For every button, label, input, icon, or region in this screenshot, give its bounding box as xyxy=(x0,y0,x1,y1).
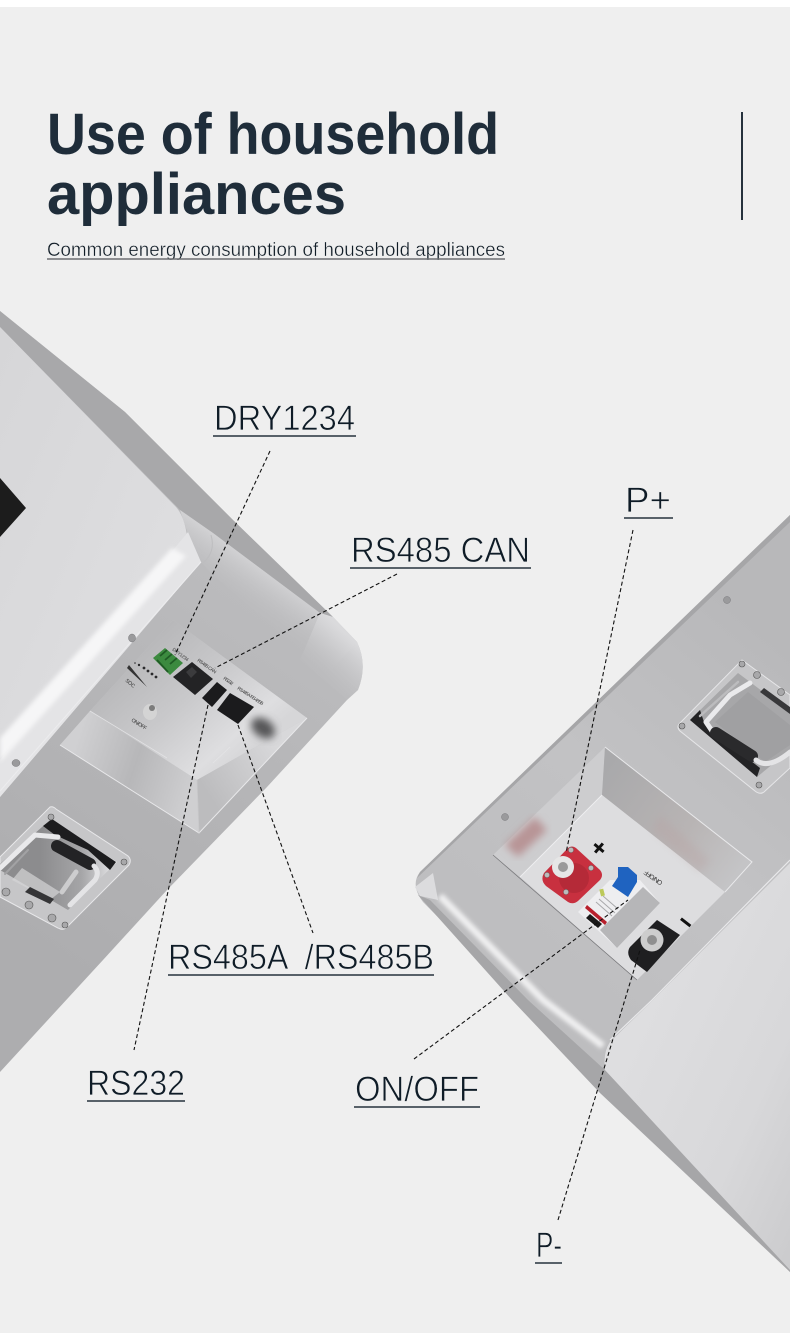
tube right xyxy=(70,866,97,905)
left carrying handle xyxy=(0,807,130,929)
port captions: ON/OFF xyxy=(130,718,148,732)
on/off knob xyxy=(143,704,157,720)
screws xyxy=(12,634,136,766)
rubber grip xyxy=(716,733,752,756)
tube xyxy=(706,683,750,731)
port captions: SOC xyxy=(124,678,136,690)
screws xyxy=(502,596,730,820)
port captions: DRY1234 xyxy=(171,647,190,662)
cavity xyxy=(690,673,790,777)
display window xyxy=(0,478,26,537)
blue switch xyxy=(612,867,637,897)
leader: P+ xyxy=(566,530,633,853)
title xyxy=(47,102,499,227)
leader: ON/OFF xyxy=(414,900,628,1059)
leader: P- xyxy=(558,950,640,1220)
left recessed port panel xyxy=(60,620,307,833)
slot xyxy=(25,887,54,904)
upper edge strip xyxy=(417,515,790,878)
battery unit: right xyxy=(415,515,790,1272)
cavity xyxy=(0,820,117,910)
right unit side body xyxy=(416,515,790,1272)
battery unit: left xyxy=(0,311,363,1072)
subtitle: Common energy consumption of household appliances xyxy=(47,240,505,261)
port captions xyxy=(124,647,264,732)
right unit lower dark edge xyxy=(418,895,790,1272)
label: RS485A /RS485B: RS485A /RS485B xyxy=(168,938,434,977)
right unit front face xyxy=(605,863,790,1270)
plus sign xyxy=(591,840,607,856)
leader: RS485A/RS485B xyxy=(238,725,313,933)
RS485A/B port xyxy=(217,693,254,724)
right recessed terminal panel xyxy=(493,747,752,980)
breaker xyxy=(578,867,660,948)
leader: RS485 CAN xyxy=(215,574,397,668)
SOC indicator xyxy=(127,662,157,687)
negative terminal xyxy=(628,920,680,972)
positive terminal xyxy=(542,846,602,903)
vertical rule xyxy=(741,112,743,220)
tube xyxy=(0,835,58,868)
left unit front face xyxy=(0,327,201,797)
blurred red reflection xyxy=(505,817,547,857)
right unit corner cap xyxy=(415,873,438,900)
label: P-: P- xyxy=(536,1226,562,1265)
right carrying handle xyxy=(678,660,790,793)
leader: RS232 xyxy=(134,705,208,1050)
on/off caption: ON/OFF xyxy=(643,868,664,886)
label: RS485 CAN: RS485 CAN xyxy=(351,531,530,570)
left unit side body xyxy=(0,311,363,1072)
tube right xyxy=(756,752,790,764)
port captions: RS232 xyxy=(222,676,235,686)
minus sign xyxy=(680,918,691,927)
shadow arc xyxy=(43,819,116,870)
label: RS232: RS232 xyxy=(87,1064,185,1103)
port captions: RS485A RS485B xyxy=(236,686,264,706)
title: Use of household xyxy=(47,102,499,167)
label: ON/OFF: ON/OFF xyxy=(355,1070,479,1109)
highlight stripe xyxy=(440,896,603,1046)
slot xyxy=(760,688,790,714)
rubber grip xyxy=(57,846,90,864)
plate xyxy=(0,807,130,929)
title: appliances xyxy=(47,162,346,227)
label: P+: P+ xyxy=(625,481,671,520)
left unit light corner band xyxy=(180,510,357,672)
green dry contact terminal xyxy=(153,648,183,675)
leader: DRY1234 xyxy=(175,451,270,655)
label: DRY1234: DRY1234 xyxy=(214,399,355,438)
port captions: RS485 CAN xyxy=(196,658,217,674)
plate xyxy=(678,660,790,793)
blurred reflection xyxy=(247,713,279,743)
RS232 port xyxy=(202,682,227,707)
shadow xyxy=(690,710,760,777)
left unit top strip xyxy=(0,311,333,617)
RS485 CAN port xyxy=(173,662,213,695)
